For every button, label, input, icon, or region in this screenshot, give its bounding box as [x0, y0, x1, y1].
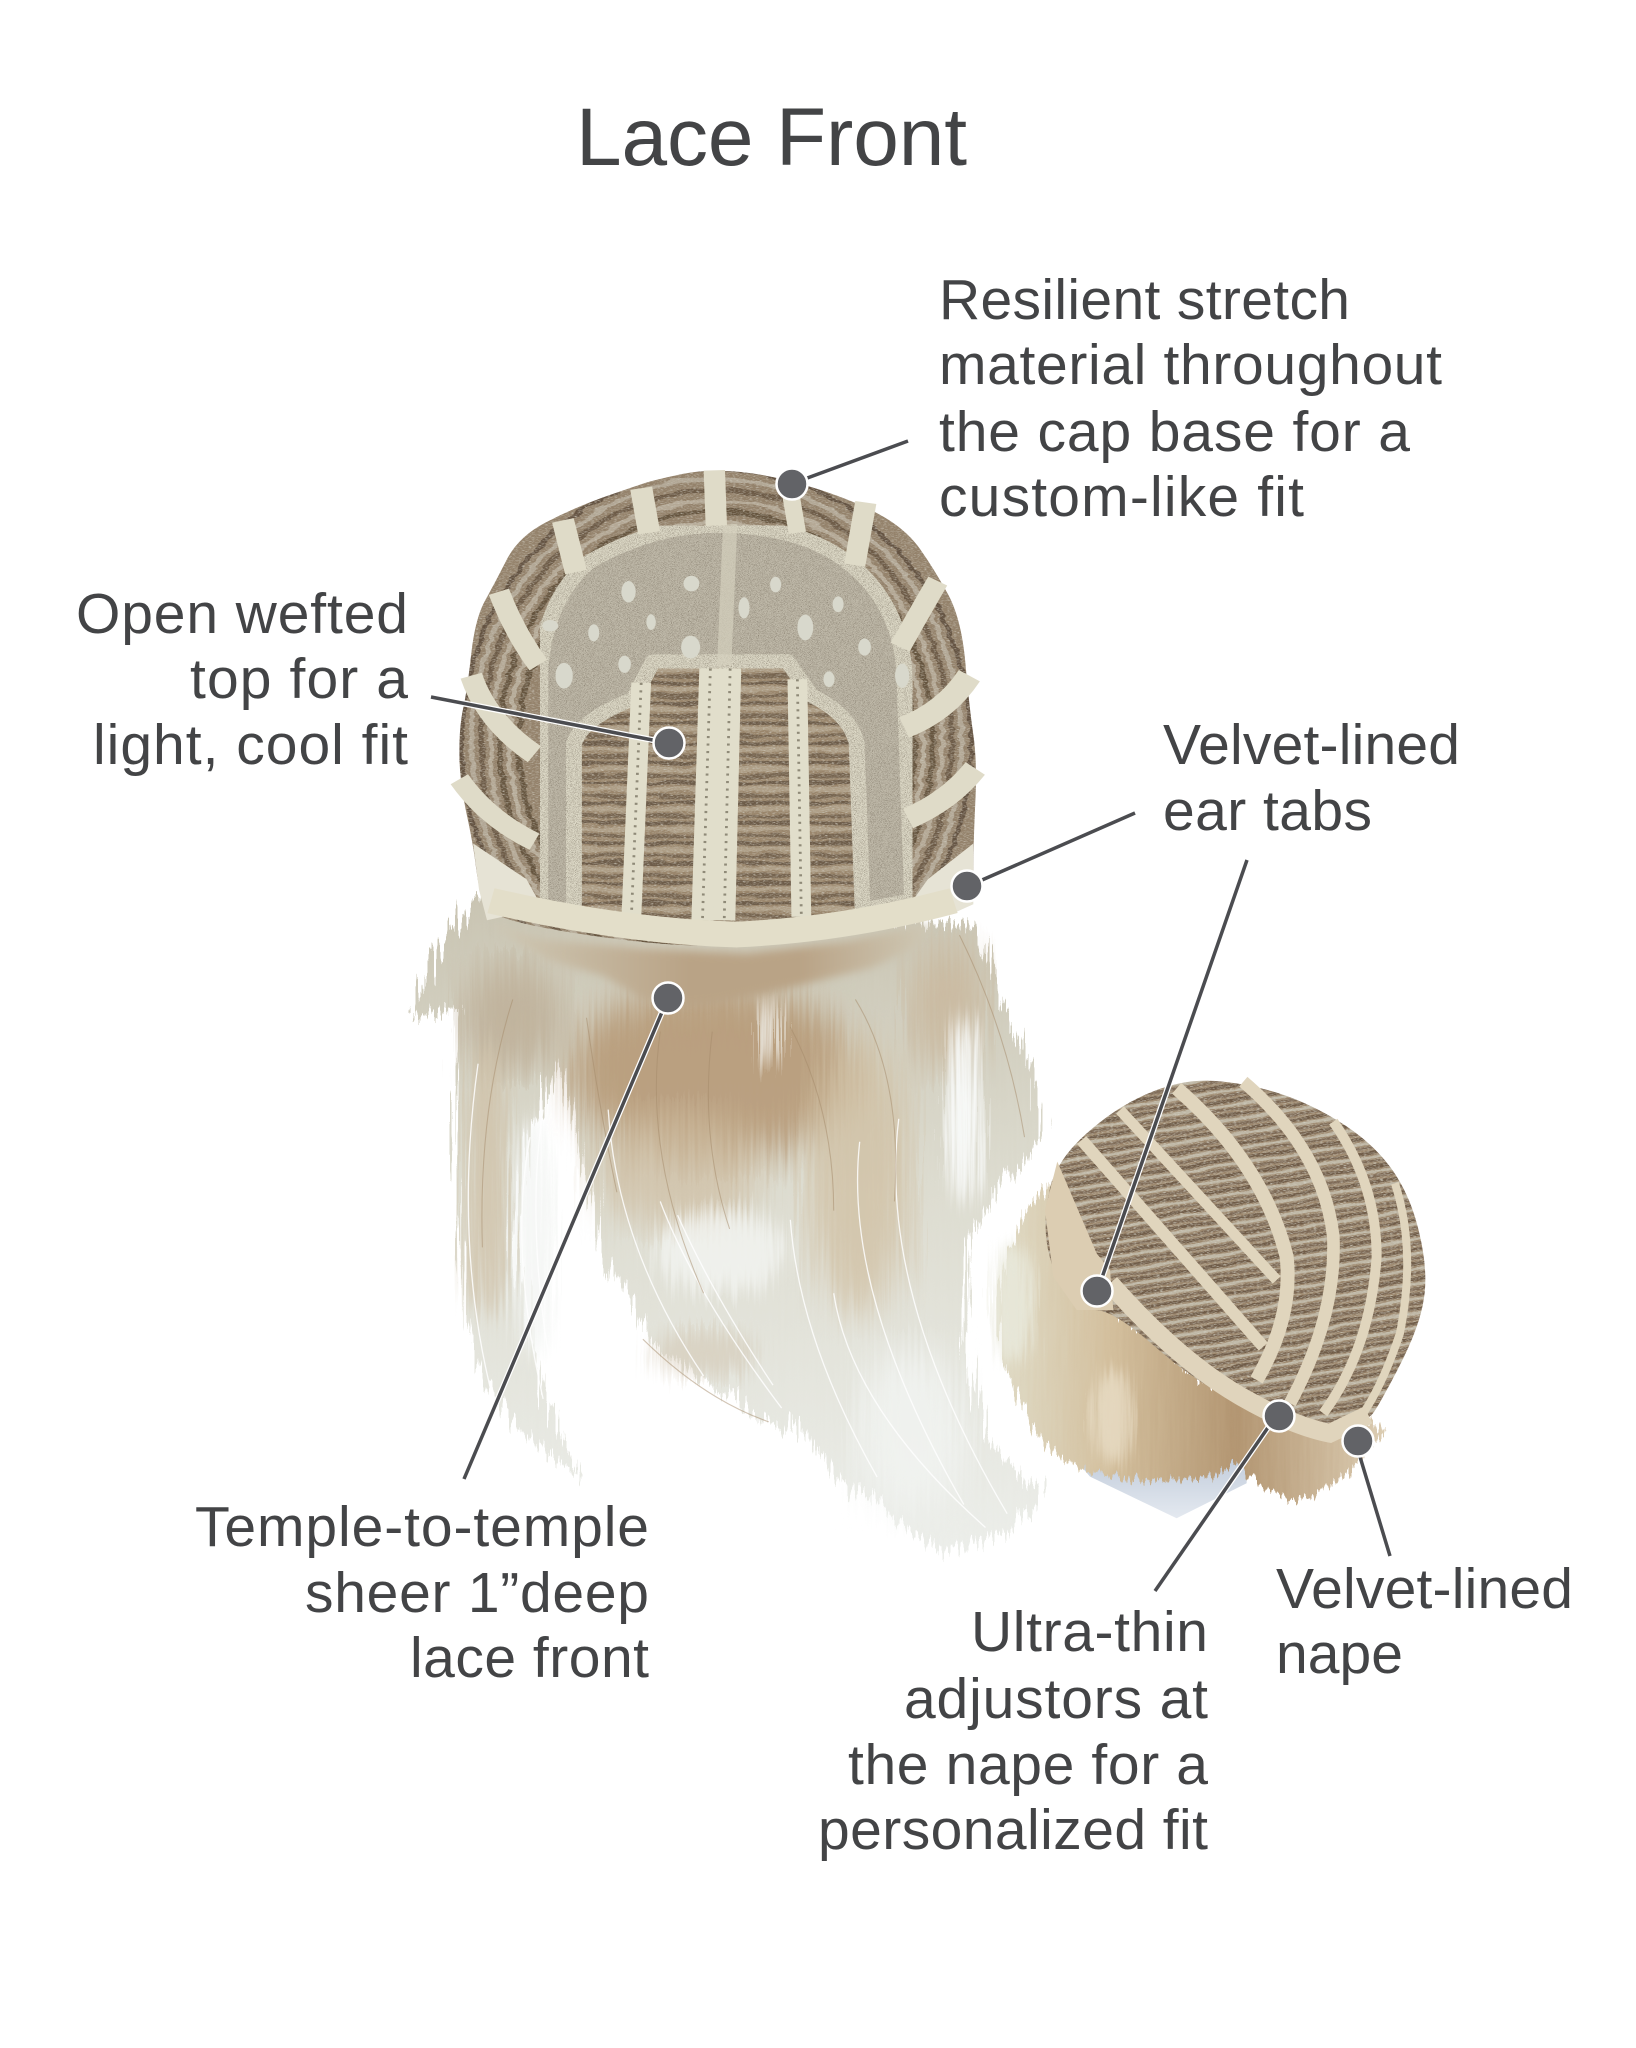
callout text: velvet ear tabs: [1163, 713, 1460, 843]
title: Lace Front: [576, 92, 967, 183]
callout text: velvet ear tabs: Velvet-lined: [1163, 713, 1460, 777]
callout line: velvet ear tabs top: [966, 813, 1135, 887]
nape band: [1110, 1283, 1368, 1433]
callout text: velvet nape: [1276, 1557, 1573, 1686]
callout text: stretch material: [939, 268, 1442, 529]
crown mesh: [540, 526, 912, 917]
callout line: adjustors: [1155, 1416, 1276, 1591]
callout text: adjustors: [818, 1600, 1208, 1862]
centre seam: [724, 524, 730, 665]
hair mass and shading: [409, 894, 1044, 1553]
callout line: small cap ear tab: [1097, 860, 1247, 1292]
callout line: lace front: [464, 998, 668, 1479]
hair strands: [468, 1064, 1007, 1527]
callout text: open wefted top: light, cool fit: [93, 713, 408, 777]
callout text: lace front: Temple-to-temple: [195, 1495, 649, 1559]
callout text: stretch material: the cap base for a: [939, 400, 1410, 464]
inner blue background: [1070, 1433, 1247, 1518]
photo: small cap side view: [993, 1067, 1453, 1518]
callout text: adjustors: the nape for a: [848, 1733, 1208, 1797]
callout dot: lace front: [652, 982, 684, 1014]
callout text: open wefted top: [76, 582, 408, 777]
ear tabs: [473, 844, 973, 920]
callout dot: stretch material: [776, 468, 808, 500]
cap base wefts: [459, 471, 976, 946]
callout text: lace front: lace front: [410, 1626, 649, 1690]
mesh dots: [542, 576, 909, 689]
callout text: stretch material: custom-like fit: [939, 465, 1304, 529]
cap wefts: [1046, 1080, 1426, 1424]
short hair: [993, 1183, 1385, 1502]
sheer lace front: [489, 924, 933, 1006]
photo: lace front hair: [409, 894, 1044, 1553]
open wefted centre: [574, 665, 863, 920]
callout text: velvet ear tabs: ear tabs: [1163, 779, 1372, 843]
callout text: stretch material: Resilient stretch: [939, 268, 1350, 332]
callout text: velvet nape: nape: [1276, 1622, 1403, 1686]
front band: [491, 901, 954, 935]
callout text: stretch material: material throughout: [939, 333, 1442, 397]
perforated vertical strips: [631, 669, 801, 920]
straps: [1082, 1082, 1407, 1413]
callout line: open wefted top: [431, 697, 668, 743]
stretch straps: [459, 470, 975, 842]
callout dot: adjustors: [1264, 1400, 1294, 1432]
velvet ear tab: [1045, 1162, 1113, 1310]
photo: large cap interior: [450, 470, 985, 948]
hair dark strands: [482, 935, 1025, 1422]
callout text: velvet nape: Velvet-lined: [1276, 1557, 1573, 1621]
callout dot: velvet ear tabs: [952, 870, 982, 902]
callout dot: small cap ear tab: [1082, 1276, 1112, 1306]
callout dot: open wefted top: [654, 728, 684, 758]
callout text: lace front: sheer 1”deep: [305, 1561, 649, 1625]
callout text: adjustors: adjustors at: [904, 1667, 1208, 1731]
callout dot: velvet nape: [1342, 1426, 1374, 1456]
callout line: velvet nape: [1354, 1437, 1390, 1556]
callout text: open wefted top: Open wefted: [76, 582, 408, 646]
callout text: adjustors: personalized fit: [818, 1798, 1208, 1862]
callout line: stretch material: [791, 441, 908, 484]
callout text: adjustors: Ultra-thin: [971, 1600, 1208, 1664]
callout text: lace front: [195, 1495, 649, 1690]
callout text: open wefted top: top for a: [190, 647, 408, 711]
